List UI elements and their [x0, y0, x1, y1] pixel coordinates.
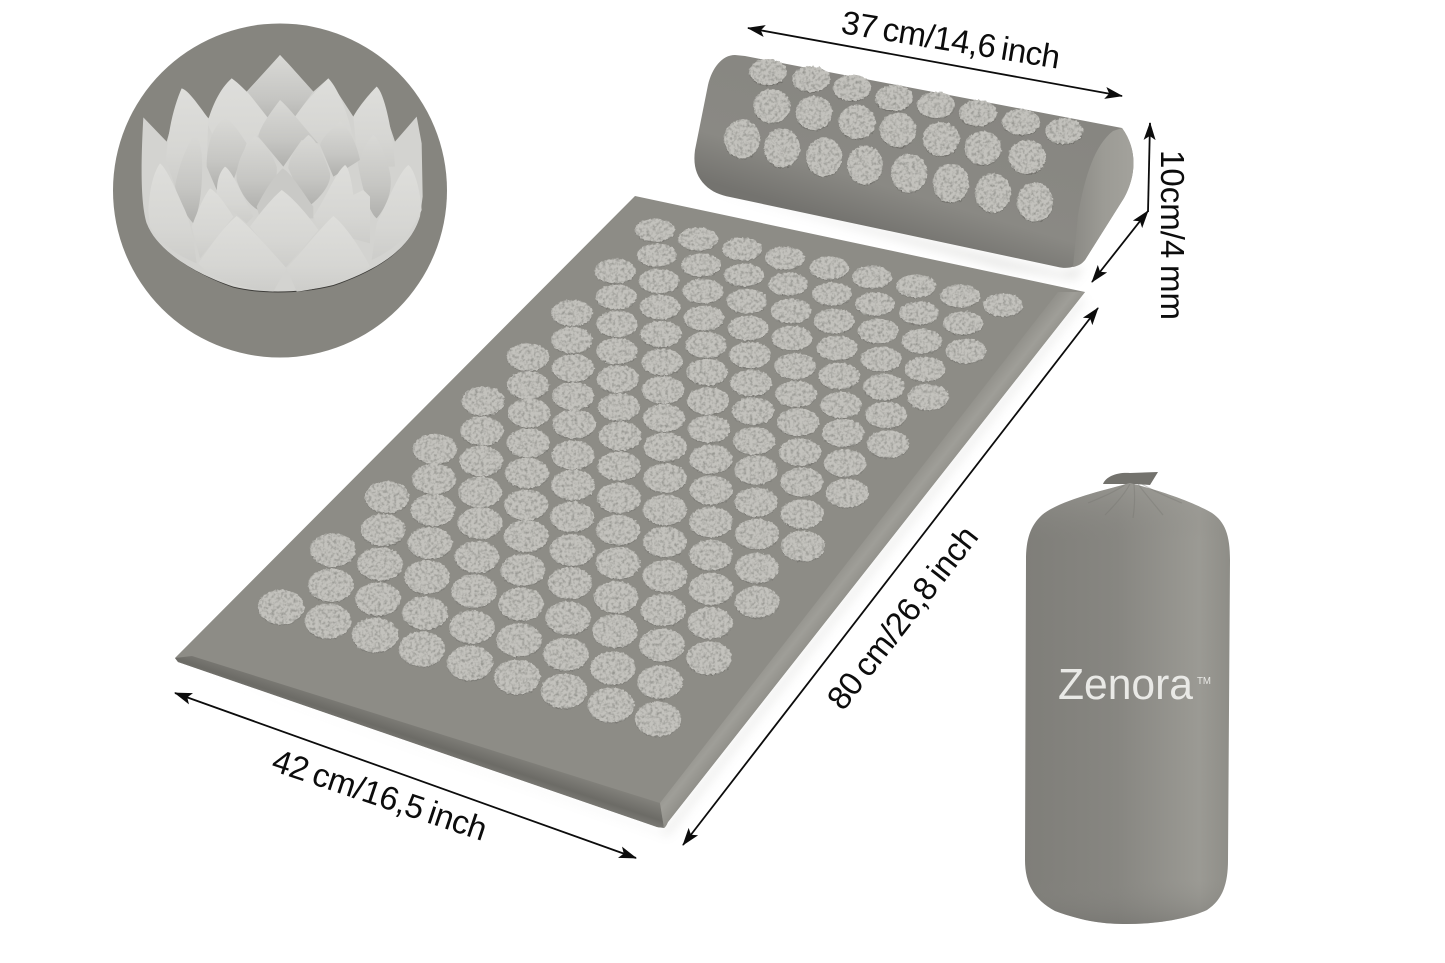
bag gathered folds: [1088, 484, 1182, 518]
bag body: [1025, 483, 1230, 924]
mat width arrow: [175, 693, 636, 858]
dimension: pillow height and depth: [1092, 123, 1191, 320]
mat acupressure spots: [258, 218, 1023, 737]
dimension: mat width: [175, 693, 636, 858]
mat length arrow: [683, 308, 1098, 845]
close-up background disc: [113, 24, 447, 358]
pillow depth arrow: [1092, 211, 1148, 282]
bag brand name: Zenora: [1058, 660, 1194, 709]
pillow height arrow: [1148, 123, 1150, 212]
trademark sign: TM: [1197, 676, 1211, 687]
panel: storage bag: [1025, 472, 1230, 924]
pillow body: [694, 55, 1134, 268]
mat shadow: [178, 298, 1086, 836]
lotus spike cluster: [142, 55, 423, 292]
pillow end cap: [1073, 128, 1134, 267]
dimension: mat length: [683, 308, 1098, 845]
mat right padded edge: [660, 292, 1085, 828]
pillow shadow: [705, 188, 1085, 280]
mat length label: 80 cm/26,8 inch: [819, 519, 985, 716]
pillow size label: 10cm/4 mm: [1154, 150, 1191, 320]
pillow acupressure spots: [724, 59, 1083, 222]
pillow width label: 37 cm/14,6 inch: [839, 3, 1063, 76]
panel: acupressure mat: [175, 196, 1086, 836]
bag drawstring top: [1103, 472, 1158, 485]
mat width label: 42 cm/16,5 inch: [268, 742, 492, 848]
panel: half-round pillow: [694, 55, 1134, 280]
panel: lotus spike close-up: [113, 24, 447, 358]
pillow width arrow: [748, 28, 1122, 96]
dimension: pillow width: [748, 3, 1122, 96]
mat base: [175, 196, 1085, 827]
mat bottom padded edge: [175, 656, 664, 828]
bag vertical shading: [1025, 483, 1230, 924]
